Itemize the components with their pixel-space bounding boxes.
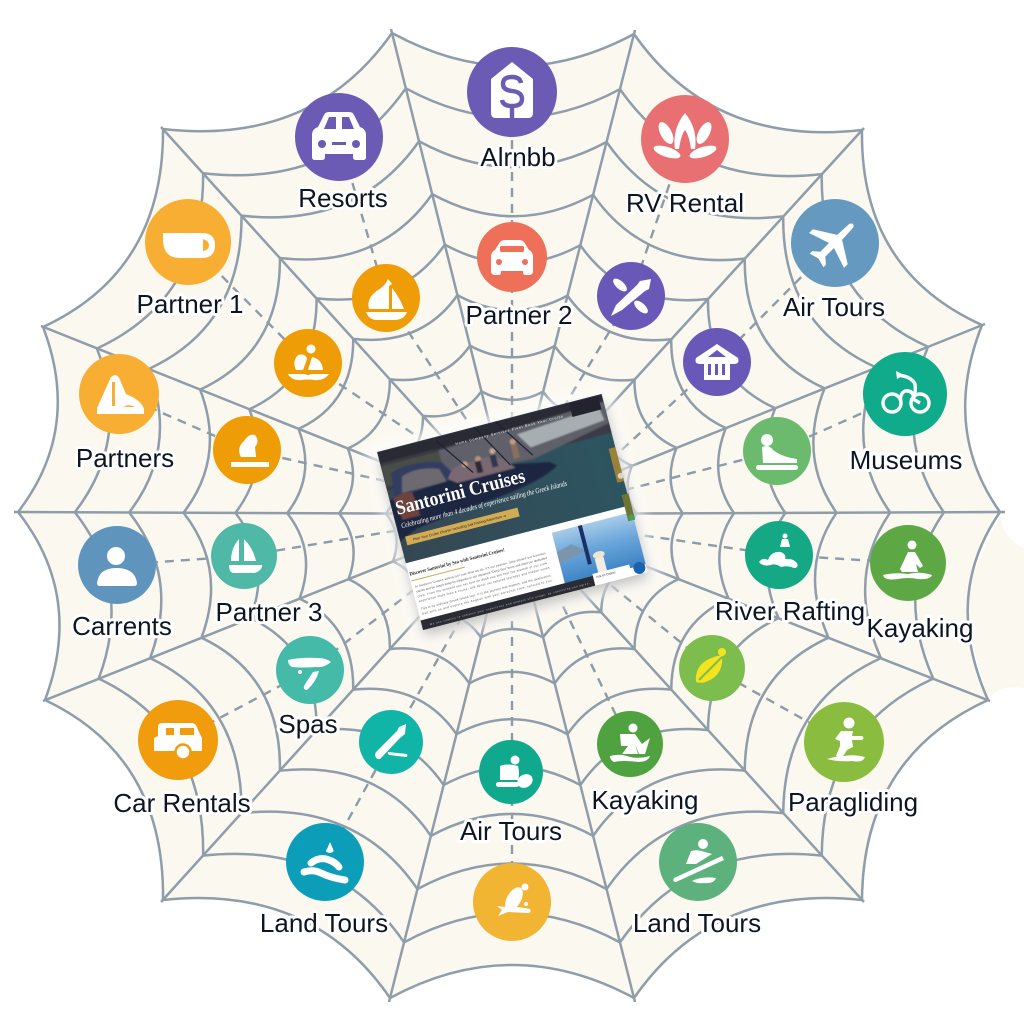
icon: person with raft	[288, 344, 329, 380]
icon: island and waves	[304, 842, 345, 880]
node: leaf	[679, 635, 745, 701]
label: Air Tours	[783, 292, 885, 322]
hero title: Santorini Cruises	[393, 465, 528, 520]
node: RV Rental	[626, 95, 744, 218]
white content panel: yachts and be swept away by elegance in our signature "Deep Sea" tours and meet our dedicated	[416, 556, 548, 594]
node: Car Rentals	[113, 700, 251, 818]
chat badge	[592, 561, 647, 586]
gold call-to-action button: Plan Your Cruise Charter Including Sail Fishing Adventure ➜	[413, 514, 508, 542]
node: cat on mat	[213, 416, 281, 484]
white content panel: crew. From the moment you set foot on deck you will feel the warmth of our crew,	[417, 561, 549, 598]
icon: camper van	[154, 723, 202, 760]
label: RV Rental	[626, 188, 744, 218]
label: Partner 3	[216, 597, 322, 627]
node: Partners	[76, 354, 174, 473]
node: museum building	[683, 328, 751, 396]
chat badge: Ask Us Online!	[596, 570, 616, 579]
node: Air Tours upper	[783, 199, 885, 322]
label: Air Tours	[460, 816, 562, 846]
node: Resorts	[295, 93, 388, 213]
icon: rock	[97, 375, 144, 414]
icon: spa shape	[288, 658, 331, 690]
icon: seated paddler	[610, 724, 650, 762]
label: Museums	[850, 445, 962, 475]
label: Alrnbb	[480, 142, 556, 172]
node: person on water	[274, 329, 342, 397]
node: Carrents	[72, 526, 172, 641]
label: Land Tours	[260, 908, 388, 938]
icon: sailboat	[366, 279, 407, 320]
central website screenshot	[365, 384, 660, 644]
node: Land Tours left	[260, 823, 388, 938]
node: Partner 1	[137, 199, 243, 319]
logo box	[569, 396, 601, 417]
white content panel	[406, 505, 648, 630]
node: sailboat	[352, 264, 420, 332]
hero photo	[377, 394, 630, 563]
node: bottom yellow	[473, 863, 551, 941]
white content panel: Sail with us and explore the Aegean with your personal crew, tailored to you.	[421, 578, 553, 616]
icon: walker	[827, 718, 865, 762]
icon: car	[312, 112, 366, 160]
label: Partner 1	[137, 289, 243, 319]
node: Air Tours lower	[460, 740, 562, 846]
icon: car	[491, 240, 533, 275]
icon: seated figure	[496, 756, 535, 791]
icon: reclining person	[756, 434, 798, 470]
label: Kayaking	[592, 785, 698, 815]
node: Paragliding	[788, 702, 918, 817]
label: Partners	[76, 443, 174, 473]
footer bar: We use cookies to enhance your experience and analyse site usage; by continuing you agree.	[429, 581, 590, 626]
white content panel: Discover Santorini by Sea with Santorini Cruises!	[409, 548, 506, 578]
label: Carrents	[72, 611, 172, 641]
side photo	[552, 512, 646, 585]
icon: cat	[231, 435, 269, 467]
node: reclining person	[743, 417, 811, 485]
white content panel: experience more than a cruise, ask about our tailored journeys and hidden coves	[418, 565, 550, 603]
icon: crossed paddles	[611, 276, 651, 316]
node: paddle arm	[359, 710, 423, 774]
label: Land Tours	[633, 908, 761, 938]
icon: lotus	[652, 113, 718, 161]
icon: kayaker	[883, 540, 932, 580]
node: Museums	[850, 352, 962, 475]
node: Spas	[276, 636, 344, 739]
gold call-to-action button	[405, 508, 520, 545]
node: Land Tours right	[633, 823, 761, 938]
node: Airbnb	[467, 47, 557, 172]
label: Resorts	[298, 183, 388, 213]
white content panel: This is no ordinary Greek island tour. It is the journey that matters, and the destination.	[420, 573, 552, 611]
icon: bicycle	[883, 371, 929, 412]
label: River Rafting	[715, 596, 865, 626]
node: River Rafting	[715, 521, 865, 626]
node: Kayaking right	[867, 525, 973, 643]
icon: cup	[163, 233, 215, 258]
label: Car Rentals	[113, 788, 251, 818]
label: Partner 2	[466, 300, 572, 330]
label: Paragliding	[788, 787, 918, 817]
cream paper patch at right edge	[960, 516, 1024, 700]
label: Spas	[278, 709, 338, 739]
white content panel: At Santorini Cruises sailing isn't just what we do, it's our passion. Step aboard our luxurious	[414, 551, 547, 589]
hero subtitle: Celebrating more than 4 decades of experience sailing the Greek Islands	[400, 479, 568, 530]
label: Kayaking	[867, 613, 973, 643]
icon: sailboat	[229, 539, 262, 573]
dashed connector lines	[117, 92, 908, 902]
node: Kayaking lower	[592, 711, 698, 815]
node: kayak paddles	[597, 262, 665, 330]
icon: classical building	[696, 344, 738, 380]
node: Partner 3	[211, 523, 322, 627]
icon: house with dollar	[491, 62, 533, 118]
icon: paddle	[375, 724, 407, 759]
node: Partner 2	[466, 222, 572, 330]
icon: user	[97, 547, 137, 586]
side tabs	[609, 447, 635, 522]
icon: bird shape	[497, 884, 531, 916]
icon: airplane	[799, 207, 870, 278]
top navigation: Home Company Services Fleet Book Your Cruise	[455, 414, 564, 446]
icon: rower	[673, 839, 724, 883]
icon: rafter	[759, 534, 798, 568]
icon: yellow leaf	[696, 648, 726, 683]
